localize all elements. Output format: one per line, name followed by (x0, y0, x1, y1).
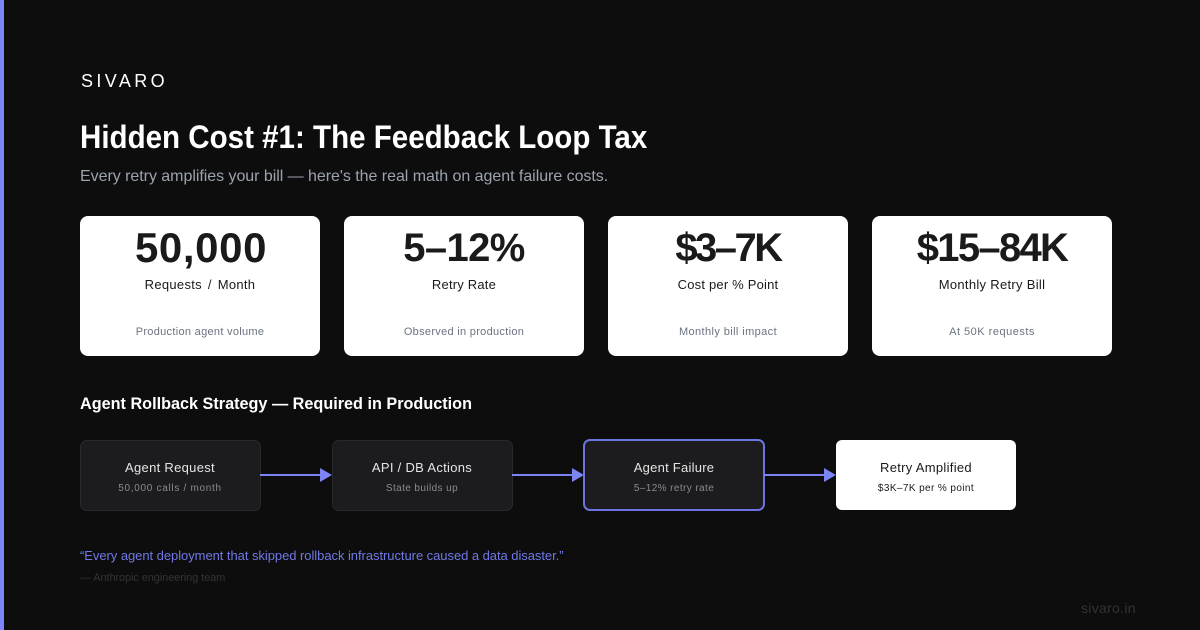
title: Hidden Cost #1: The Feedback Loop Tax (80, 119, 647, 155)
flow node: agent failure: 5–12% retry rate (634, 483, 714, 494)
section heading: Agent Rollback Strategy — Required in Production (80, 394, 472, 413)
quote: “Every agent deployment that skipped rollback infrastructure caused a data disaster.” (80, 548, 564, 563)
stat card: monthly retry bill: Monthly Retry Bill (939, 277, 1045, 292)
stat card: retry rate (344, 216, 584, 356)
stat card: requests: 50,000 (135, 224, 267, 271)
stat card: requests (80, 216, 320, 356)
flow node: api actions (332, 440, 512, 510)
flow node: retry amplified (836, 440, 1016, 510)
subtitle: Every retry amplifies your bill — here's the real math on agent failure costs. (80, 168, 608, 185)
stat card: retry rate: Retry Rate (432, 277, 496, 292)
footer url: sivaro.in (1081, 600, 1136, 616)
arrow: actions to failure (512, 468, 583, 482)
flow node: agent request: Agent Request (125, 460, 215, 474)
stat card: monthly retry bill (872, 216, 1112, 356)
quote attribution: — Anthropic engineering team (80, 572, 225, 584)
flow node: agent request (80, 440, 260, 510)
flow node: retry amplified: $3K–7K per % point (878, 483, 974, 494)
arrow: request to actions (260, 468, 332, 482)
stat card: retry rate: Observed in production (404, 326, 524, 338)
stat card: cost per point: $3–7K (675, 226, 781, 270)
stat card: cost per point: Monthly bill impact (679, 326, 777, 338)
flow node: agent request: 50,000 calls / month (118, 482, 222, 494)
flow node: retry amplified: Retry Amplified (880, 460, 972, 475)
accent bar (0, 0, 4, 630)
brand logo text: SIVARO (81, 71, 168, 91)
flow node: api actions: State builds up (386, 482, 458, 494)
stat card: requests: Requests / Month (145, 277, 255, 292)
stat card: monthly retry bill: At 50K requests (949, 326, 1035, 338)
stat card: retry rate: 5–12% (403, 226, 525, 270)
stat card: requests: Production agent volume (136, 326, 264, 338)
flow node: agent failure: Agent Failure (634, 460, 714, 475)
arrow: failure to retry (764, 468, 836, 482)
stat card: cost per point (608, 216, 848, 356)
stat card: cost per point: Cost per % Point (678, 277, 778, 292)
flow node: agent failure (583, 439, 765, 511)
flow node: api actions: API / DB Actions (372, 460, 472, 474)
stat card: monthly retry bill: $15–84K (917, 226, 1067, 270)
